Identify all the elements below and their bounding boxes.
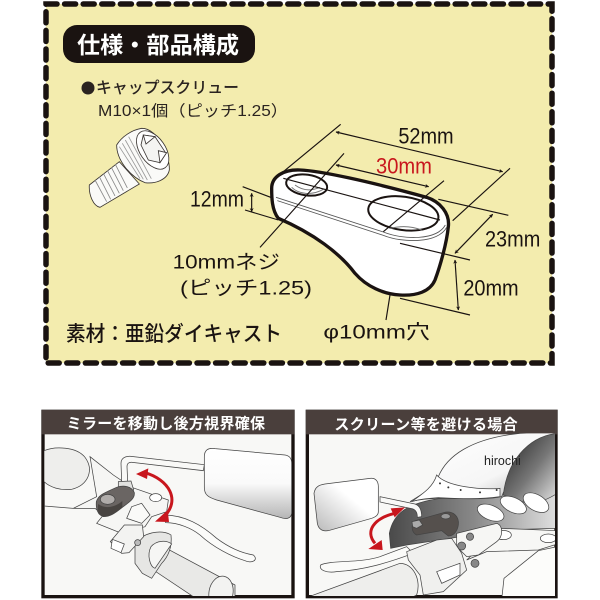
icon: cap screw xyxy=(89,125,175,207)
mirror xyxy=(204,448,292,519)
handlebar band xyxy=(467,528,557,560)
diagram: mirror adapter with dimensions xyxy=(173,123,540,343)
header bar xyxy=(42,410,294,434)
master cylinder body xyxy=(407,538,467,595)
dark inner cowl xyxy=(389,494,555,549)
brake perch xyxy=(457,523,502,557)
dimension labels: 20mm xyxy=(463,276,519,301)
header bar xyxy=(306,410,557,434)
icon: red curved arrow xyxy=(136,468,172,522)
nut xyxy=(118,480,134,490)
windscreen xyxy=(410,432,557,502)
illustration: screen and handlebar xyxy=(309,432,557,597)
dimension labels: 12mm xyxy=(190,187,244,212)
icon: red curved arrow xyxy=(368,507,405,550)
clamp arm xyxy=(412,512,458,536)
dimension lines xyxy=(243,124,510,320)
text: material: 素材：亜鉛ダイキャスト xyxy=(66,323,282,346)
watermark: hirochi xyxy=(484,454,521,468)
lever xyxy=(320,547,413,572)
panel: avoiding the screen xyxy=(306,410,557,597)
adapter body xyxy=(272,170,449,295)
master cylinder cap xyxy=(44,448,89,490)
dimension labels: 23mm xyxy=(485,227,540,252)
panel: specifications xyxy=(46,4,552,363)
mirror stem xyxy=(380,497,422,517)
dimension labels: (ピッチ1.25) xyxy=(180,278,312,299)
dimension labels: 30mm xyxy=(376,153,432,178)
text: cap screw caption xyxy=(82,79,288,120)
lever xyxy=(163,515,255,562)
brake body xyxy=(44,457,168,533)
mirror xyxy=(314,478,378,531)
dimension labels: 52mm xyxy=(398,123,454,148)
text: cap screw caption: キャップスクリュー xyxy=(96,79,239,97)
switch block xyxy=(110,525,144,553)
heading pill: specs and parts: 仕様・部品構成 xyxy=(77,32,239,58)
text: cap screw caption: M10×1個（ピッチ1.25） xyxy=(98,102,288,120)
dimension labels: 10mmネジ xyxy=(173,252,280,273)
heading pill: specs and parts xyxy=(63,25,255,63)
throttle collar xyxy=(135,532,171,578)
panel: moving the mirror for rear visibility xyxy=(42,410,294,600)
illustration: handlebar with mirror moved xyxy=(44,448,292,600)
dimension labels: φ10mm穴 xyxy=(323,321,430,343)
grip xyxy=(156,550,236,596)
dimension labels xyxy=(173,123,540,343)
header bar: スクリーン等を避ける場合 xyxy=(334,415,518,433)
header bar: ミラーを移動し後方視界確保 xyxy=(67,415,265,433)
clamp arm xyxy=(96,486,134,517)
mirror stem xyxy=(121,456,204,482)
grip xyxy=(309,563,418,597)
